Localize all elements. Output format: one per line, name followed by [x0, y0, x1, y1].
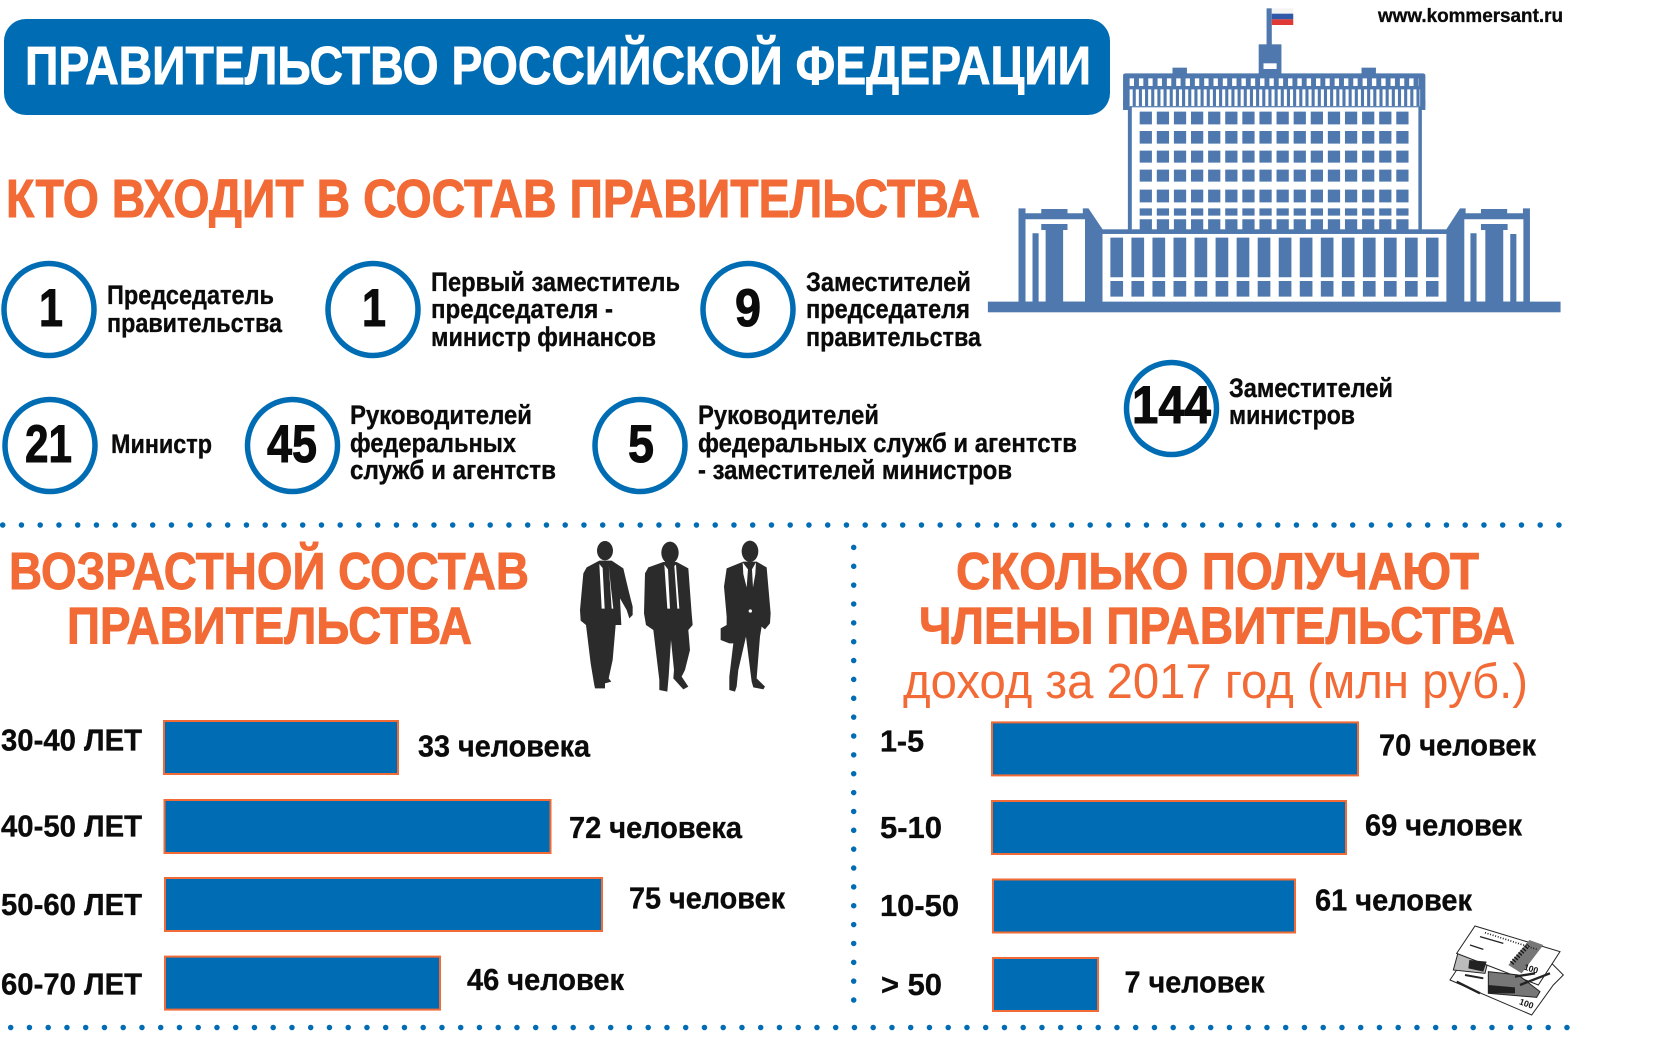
item: deputies: правительства [806, 322, 981, 352]
bar: 40-50: 40-50 ЛЕТ [1, 808, 142, 843]
bar: over 50 [881, 958, 1265, 1011]
bar: 10-50: 10-50 [880, 888, 959, 923]
bar: 5-10: 69 человек [1365, 807, 1522, 842]
bar: 50-60: 50-60 ЛЕТ [1, 887, 142, 922]
heading: income [903, 543, 1528, 709]
bar: 5-10: 5-10 [880, 810, 942, 845]
item: chairman: правительства [107, 308, 282, 338]
item: heads of services: 45 [267, 415, 317, 474]
item: heads of services: служб и агентств [350, 455, 556, 485]
source url: www.kommersant.ru [1377, 5, 1563, 27]
bar: 40-50 [1, 800, 743, 853]
item: deputy ministers: Заместителей [1229, 373, 1393, 403]
panel: government composition [4, 264, 1393, 492]
heading: age composition [9, 542, 529, 656]
title banner [4, 19, 1110, 115]
item: deputies [703, 264, 981, 356]
bar: 60-70: 46 человек [467, 962, 624, 997]
item: deputy ministers: министров [1229, 400, 1355, 430]
heading: income: СКОЛЬКО ПОЛУЧАЮТ [956, 543, 1479, 601]
bar: 60-70 [1, 957, 624, 1010]
item: deputy ministers: 144 [1132, 376, 1211, 435]
item: heads of services, deputy ministers: 5 [628, 415, 654, 474]
icon: money bundles [1450, 926, 1563, 1015]
item: deputy ministers [1126, 362, 1393, 454]
item: ministers [5, 400, 212, 492]
bar: 30-40 [1, 721, 591, 774]
item: heads of services: федеральных [350, 428, 516, 458]
item: first deputy: министр финансов [431, 322, 656, 352]
item: heads of services [248, 400, 556, 492]
heading: income: ЧЛЕНЫ ПРАВИТЕЛЬСТВА [919, 598, 1515, 656]
bar: over 50: 7 человек [1124, 965, 1265, 1000]
item: ministers: 21 [25, 415, 72, 474]
bar: 30-40: 33 человека [418, 728, 591, 763]
item: chairman: 1 [39, 279, 63, 338]
heading: income: доход за 2017 год (млн руб.) [903, 655, 1528, 709]
icon: money bundles: 100 [1518, 996, 1535, 1011]
bar: 1-5: 70 человек [1379, 727, 1536, 762]
item: chairman [4, 264, 282, 356]
bar: 30-40: 30-40 ЛЕТ [1, 722, 142, 757]
item: first deputy [328, 264, 680, 356]
icon: three businessmen silhouettes [580, 541, 771, 692]
bar chart: income [880, 722, 1536, 1011]
title banner: ПРАВИТЕЛЬСТВО РОССИЙСКОЙ ФЕДЕРАЦИИ [25, 35, 1091, 96]
item: first deputy: председателя - [431, 294, 613, 324]
item: heads of services, deputy ministers [595, 400, 1077, 492]
icon: government building [988, 8, 1561, 312]
heading: age composition: ПРАВИТЕЛЬСТВА [67, 598, 472, 656]
bar: 40-50: 72 человека [569, 810, 743, 845]
item: heads of services, deputy ministers: - заместителей министров [698, 455, 1012, 485]
bar: 60-70: 60-70 ЛЕТ [1, 966, 142, 1001]
heading: age composition: ВОЗРАСТНОЙ СОСТАВ [9, 542, 529, 601]
item: chairman: Председатель [107, 280, 274, 310]
bar: 10-50 [880, 880, 1472, 932]
item: deputies: Заместителей [806, 267, 971, 297]
bar: 50-60: 75 человек [629, 880, 785, 915]
bar: over 50: > 50 [881, 967, 942, 1002]
item: first deputy: 1 [362, 279, 386, 338]
bar: 1-5: 1-5 [880, 723, 924, 758]
item: ministers: Министр [111, 429, 212, 459]
item: heads of services, deputy ministers: Руководителей [698, 400, 879, 430]
item: deputies: 9 [735, 279, 761, 338]
bar: 5-10 [880, 801, 1522, 854]
item: heads of services, deputy ministers: федеральных служб и агентств [698, 428, 1077, 458]
heading: who is in the government: КТО ВХОДИТ В СОСТАВ ПРАВИТЕЛЬСТВА [6, 169, 980, 229]
item: first deputy: Первый заместитель [431, 267, 680, 297]
bar: 10-50: 61 человек [1315, 882, 1472, 917]
icon: money bundles: 100 [1523, 962, 1540, 976]
bar chart: age [1, 721, 785, 1010]
item: heads of services: Руководителей [350, 400, 532, 430]
item: deputies: председателя [806, 294, 970, 324]
bar: 1-5 [880, 722, 1536, 775]
bar: 50-60 [1, 878, 785, 931]
